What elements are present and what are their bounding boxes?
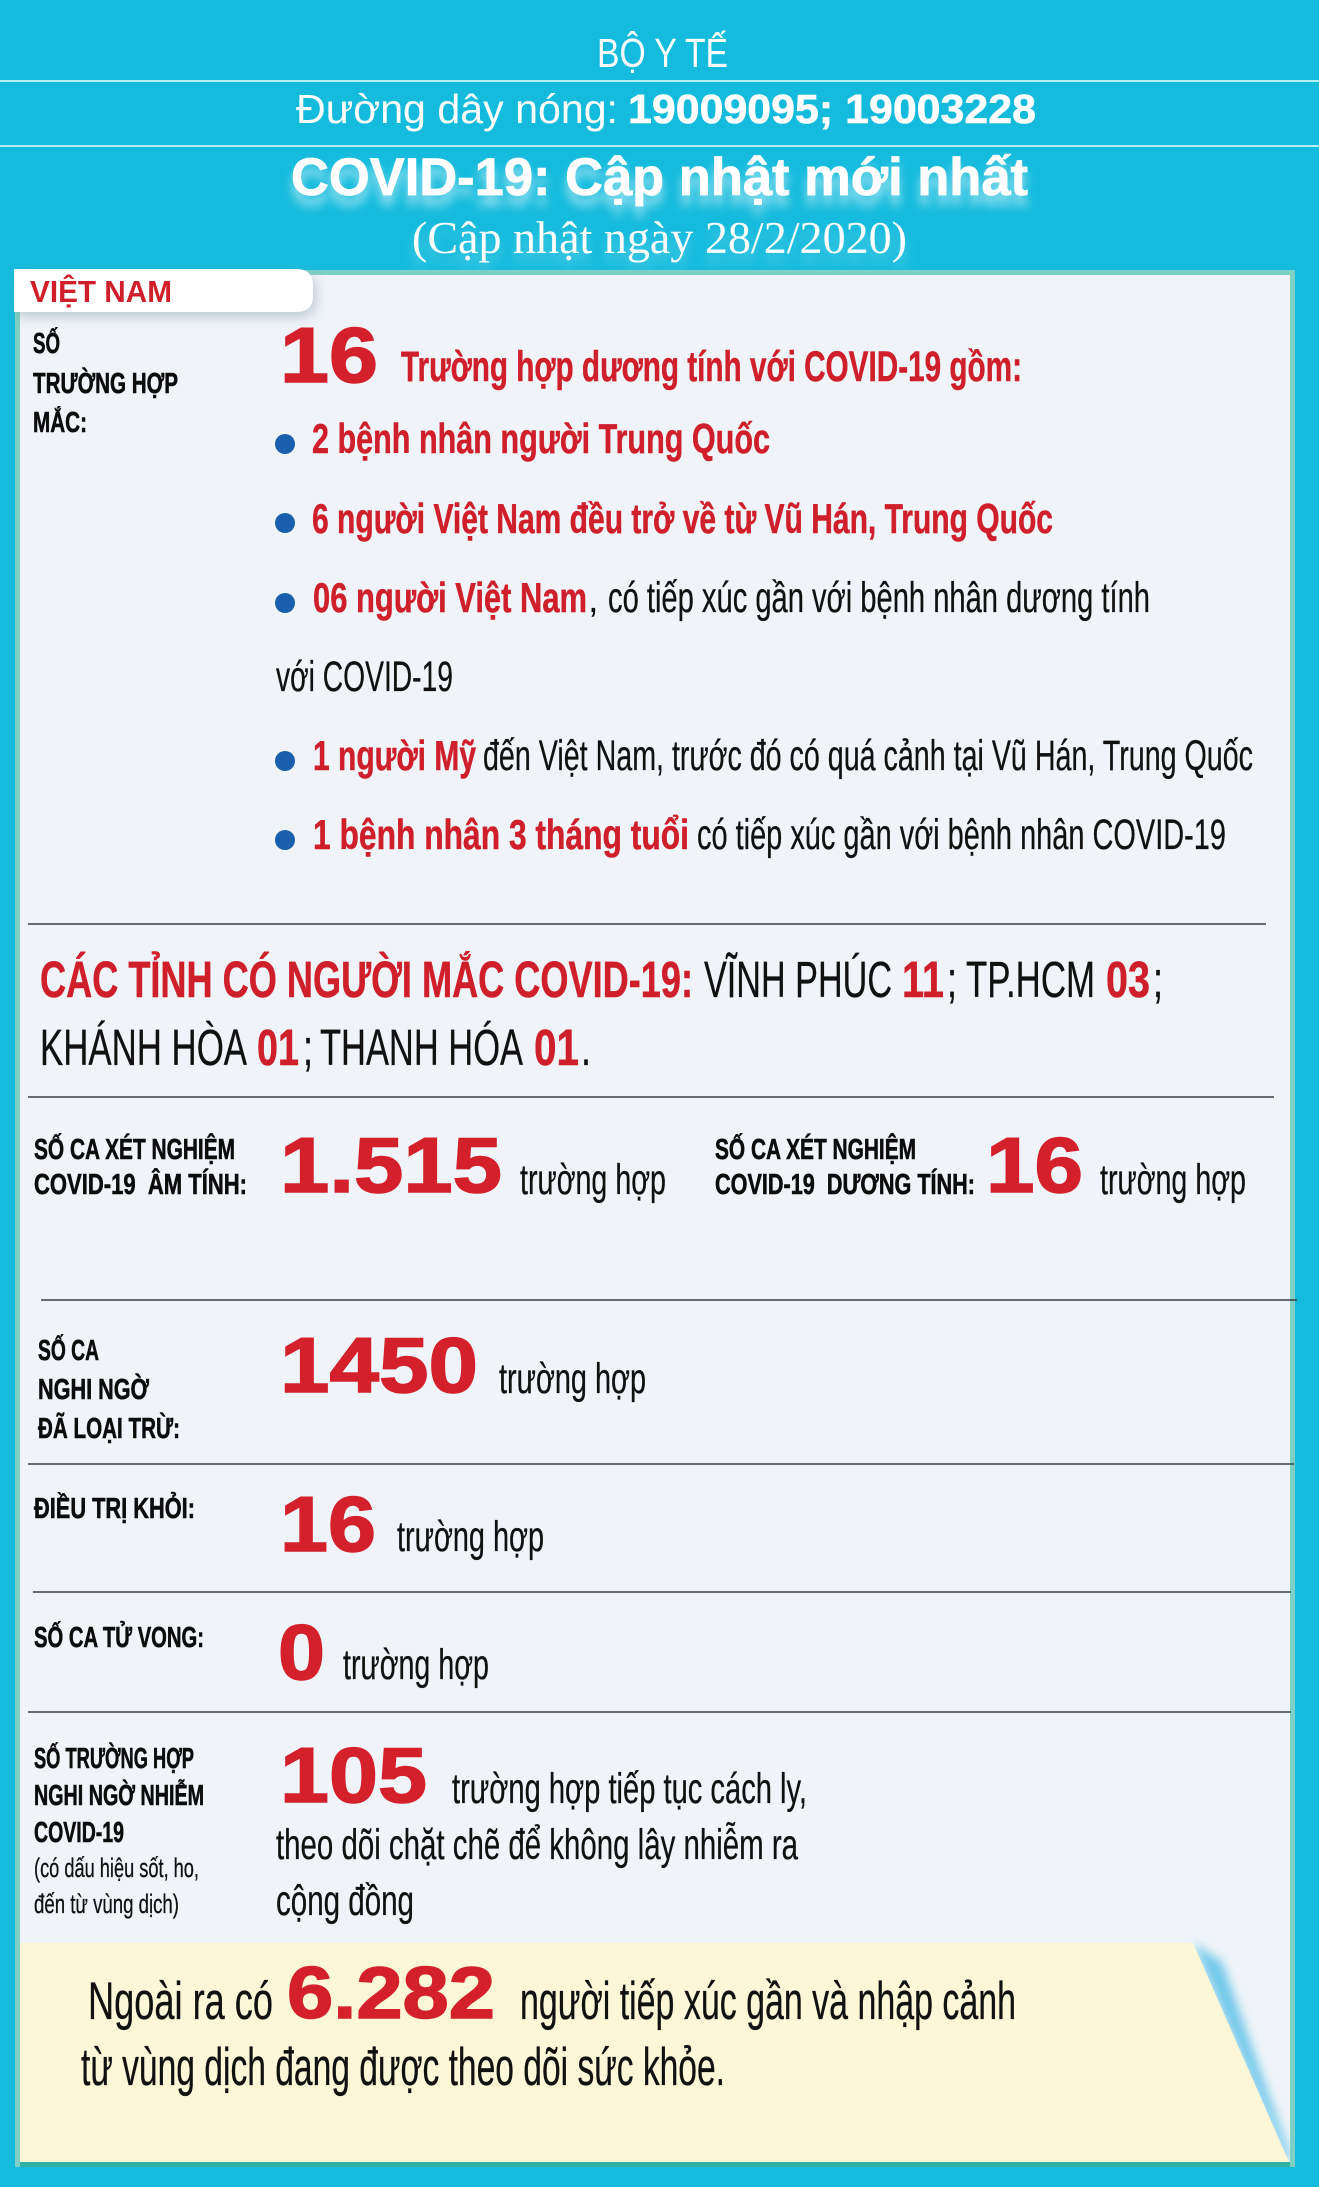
provinces with cases xyxy=(40,950,1163,1076)
case list: 2 bệnh nhân người Trung Quốc xyxy=(312,415,770,462)
suspected cases under isolation: NGHI NGỜ NHIỄM xyxy=(34,1778,204,1812)
tab: Việt Nam xyxy=(14,269,313,312)
excluded suspected cases: NGHI NGỜ xyxy=(38,1372,149,1406)
case list: 1 người Mỹ xyxy=(313,732,476,779)
suspected cases under isolation: theo dõi chặt chẽ để không lây nhiễm ra xyxy=(276,1821,798,1869)
excluded suspected cases: trường hợp xyxy=(499,1355,646,1403)
positive tests: 16 xyxy=(986,1121,1083,1209)
provinces with cases: 01 xyxy=(257,1019,299,1076)
positive tests: COVID-19 DƯƠNG TÍNH: xyxy=(715,1167,975,1201)
suspected cases under isolation: (có dấu hiệu sốt, ho, xyxy=(34,1853,199,1883)
confirmed cases headline: Trường hợp dương tính với COVID-19 gồm: xyxy=(401,343,1022,391)
suspected cases under isolation: đến từ vùng dịch) xyxy=(34,1889,179,1919)
callout: close contacts xyxy=(20,1943,1292,2162)
provinces with cases: ; xyxy=(303,1019,313,1076)
case list: 06 người Việt Nam xyxy=(313,574,587,621)
title: COVID-19: Cập nhật mới nhất xyxy=(291,148,1028,207)
negative tests: 1.515 xyxy=(280,1121,502,1209)
provinces with cases: 11 xyxy=(902,951,944,1008)
negative tests: trường hợp xyxy=(520,1156,666,1204)
suspected cases under isolation: SỐ TRƯỜNG HỢP xyxy=(34,1741,194,1775)
provinces with cases: KHÁNH HÒA xyxy=(40,1019,247,1076)
deaths: 0 xyxy=(278,1608,325,1696)
excluded suspected cases xyxy=(38,1321,646,1445)
case list: 1 bệnh nhân 3 tháng tuổi xyxy=(313,811,689,858)
provinces with cases: ; xyxy=(947,951,957,1008)
callout: close contacts: 6.282 xyxy=(287,1953,495,2034)
negative tests xyxy=(34,1121,666,1209)
case list: 6 người Việt Nam đều trở về từ Vũ Hán, Trung Quốc xyxy=(312,495,1053,542)
suspected cases under isolation: COVID-19 xyxy=(34,1817,124,1849)
provinces with cases: VĨNH PHÚC xyxy=(704,951,892,1008)
suspected cases under isolation: 105 xyxy=(280,1731,427,1819)
positive tests: trường hợp xyxy=(1100,1156,1246,1204)
case list: với COVID-19 xyxy=(276,653,453,701)
excluded suspected cases: SỐ CA xyxy=(38,1333,99,1367)
suspected cases under isolation: trường hợp tiếp tục cách ly, xyxy=(452,1765,807,1813)
deaths: trường hợp xyxy=(343,1641,489,1689)
negative tests: COVID-19 ÂM TÍNH: xyxy=(34,1167,247,1201)
callout: close contacts: Ngoài ra có xyxy=(88,1972,273,2031)
provinces with cases: . xyxy=(581,1019,591,1076)
label: confirmed cases: SỐ xyxy=(33,326,60,360)
recovered: trường hợp xyxy=(397,1513,544,1561)
hotline: 19009095; 19003228 xyxy=(628,86,1036,132)
provinces with cases: 03 xyxy=(1106,951,1150,1008)
hotline xyxy=(296,86,1036,132)
suspected cases under isolation: cộng đồng xyxy=(276,1877,414,1925)
organisation name: BỘ Y TẾ xyxy=(597,30,728,76)
provinces with cases: ; xyxy=(1153,951,1163,1008)
provinces with cases: 01 xyxy=(534,1019,579,1076)
label: confirmed cases: TRƯỜNG HỢP xyxy=(33,366,178,400)
recovered: ĐIỀU TRỊ KHỎI: xyxy=(34,1491,195,1525)
positive tests xyxy=(715,1121,1246,1209)
excluded suspected cases: 1450 xyxy=(280,1321,478,1409)
recovered xyxy=(34,1480,544,1568)
confirmed cases headline: 16 xyxy=(280,311,378,399)
deaths xyxy=(34,1608,489,1696)
provinces with cases: TP.HCM xyxy=(966,951,1095,1008)
negative tests: SỐ CA XÉT NGHIỆM xyxy=(34,1132,235,1166)
case list xyxy=(275,415,1253,859)
hotline: Đường dây nóng: xyxy=(296,86,618,132)
callout: close contacts: từ vùng dịch đang được theo dõi sức khỏe. xyxy=(81,2038,725,2097)
update date: (Cập nhật ngày 28/2/2020) xyxy=(412,213,907,263)
provinces with cases: THANH HÓA xyxy=(320,1019,523,1076)
positive tests: SỐ CA XÉT NGHIỆM xyxy=(715,1132,916,1166)
case list: , xyxy=(588,579,599,621)
confirmed cases headline xyxy=(280,311,1022,399)
deaths: SỐ CA TỬ VONG: xyxy=(34,1620,204,1654)
suspected cases under isolation xyxy=(34,1731,807,1925)
recovered: 16 xyxy=(280,1480,376,1568)
label: confirmed cases xyxy=(33,326,178,439)
callout: close contacts: người tiếp xúc gần và nhập cảnh xyxy=(520,1972,1016,2031)
provinces with cases: CÁC TỈNH CÓ NGƯỜI MẮC COVID-19: xyxy=(40,950,693,1008)
excluded suspected cases: ĐÃ LOẠI TRỪ: xyxy=(38,1411,180,1445)
label: confirmed cases: MẮC: xyxy=(33,405,87,439)
header xyxy=(0,30,1319,263)
tab: Việt Nam: VIỆT NAM xyxy=(30,273,172,309)
